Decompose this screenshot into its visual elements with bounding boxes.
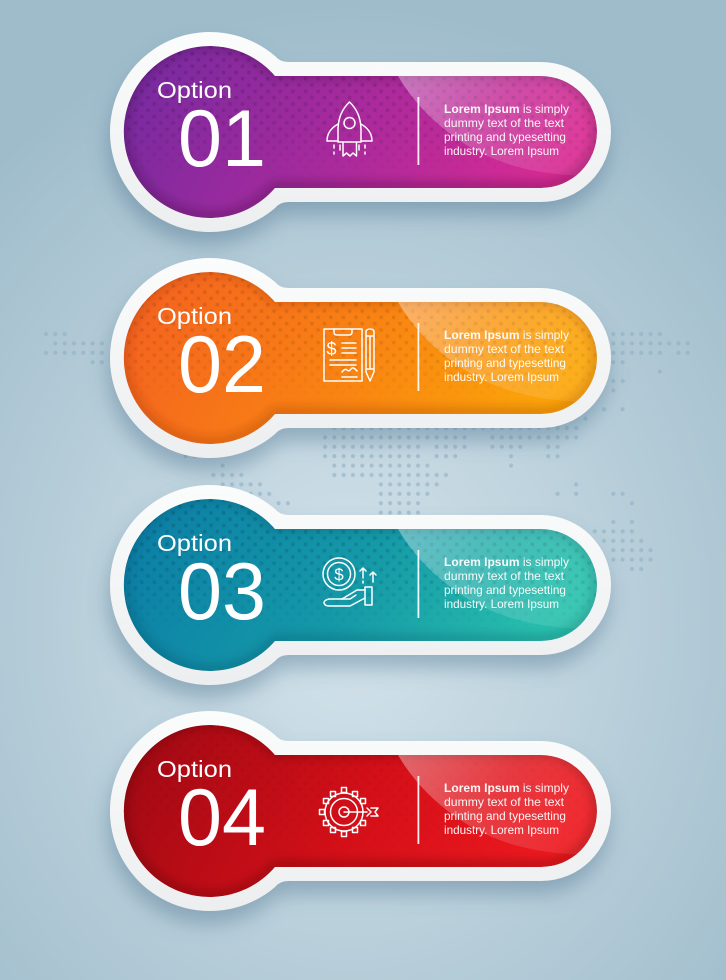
colour panel 03 [124,497,600,671]
body text 03: printing and typesetting [444,584,566,597]
body text 01: Lorem Ipsum is simply [444,103,569,116]
body text 01: industry. Lorem Ipsum [444,145,559,158]
card 03 [110,485,611,685]
label: Option 01: Option [157,77,232,103]
divider [418,550,419,618]
white frame 02 [110,258,611,458]
body text 04: printing and typesetting [444,810,566,823]
body text 02: printing and typesetting [444,357,566,370]
card 01 [110,32,611,232]
icon: invoice and pen: $ [326,339,337,359]
icon: rocket [327,102,372,156]
body text 03: industry. Lorem Ipsum [444,598,559,611]
number 03: 03 [178,547,266,637]
card 04 [110,711,611,911]
colour panel 02 [124,270,600,444]
body text 03: Lorem Ipsum is simply [444,556,569,569]
label: Option 04: Option [157,756,232,782]
body text 02: industry. Lorem Ipsum [444,371,559,384]
body text 04 [444,782,569,837]
body text 03 [444,556,569,611]
body text 01: dummy text of the text [444,117,565,130]
body text 03: dummy text of the text [444,570,565,583]
body text 04: dummy text of the text [444,796,565,809]
number 04: 04 [178,773,266,863]
label: Option 03: Option [157,530,232,556]
body text 02 [444,329,569,384]
divider [418,776,419,844]
number 02: 02 [178,320,266,410]
divider [418,323,419,391]
body text 04: industry. Lorem Ipsum [444,824,559,837]
body text 04: Lorem Ipsum is simply [444,782,569,795]
body text 01: printing and typesetting [444,131,566,144]
white frame 03 [110,485,611,685]
divider [418,97,419,165]
white frame 04 [110,711,611,911]
world map dots [41,329,692,574]
icon: target gear and arrow [320,788,378,836]
icon: invoice and pen [324,329,374,381]
card 02 [110,258,611,458]
icon: coin in hand: $ [334,565,344,584]
label: Option 02: Option [157,303,232,329]
body text 02: dummy text of the text [444,343,565,356]
body text 02: Lorem Ipsum is simply [444,329,569,342]
body text 01 [444,103,569,158]
white frame 01 [110,32,611,232]
number 01: 01 [178,94,266,184]
colour panel 01 [124,44,600,218]
icon: coin in hand [323,558,376,606]
colour panel 04 [124,723,600,897]
